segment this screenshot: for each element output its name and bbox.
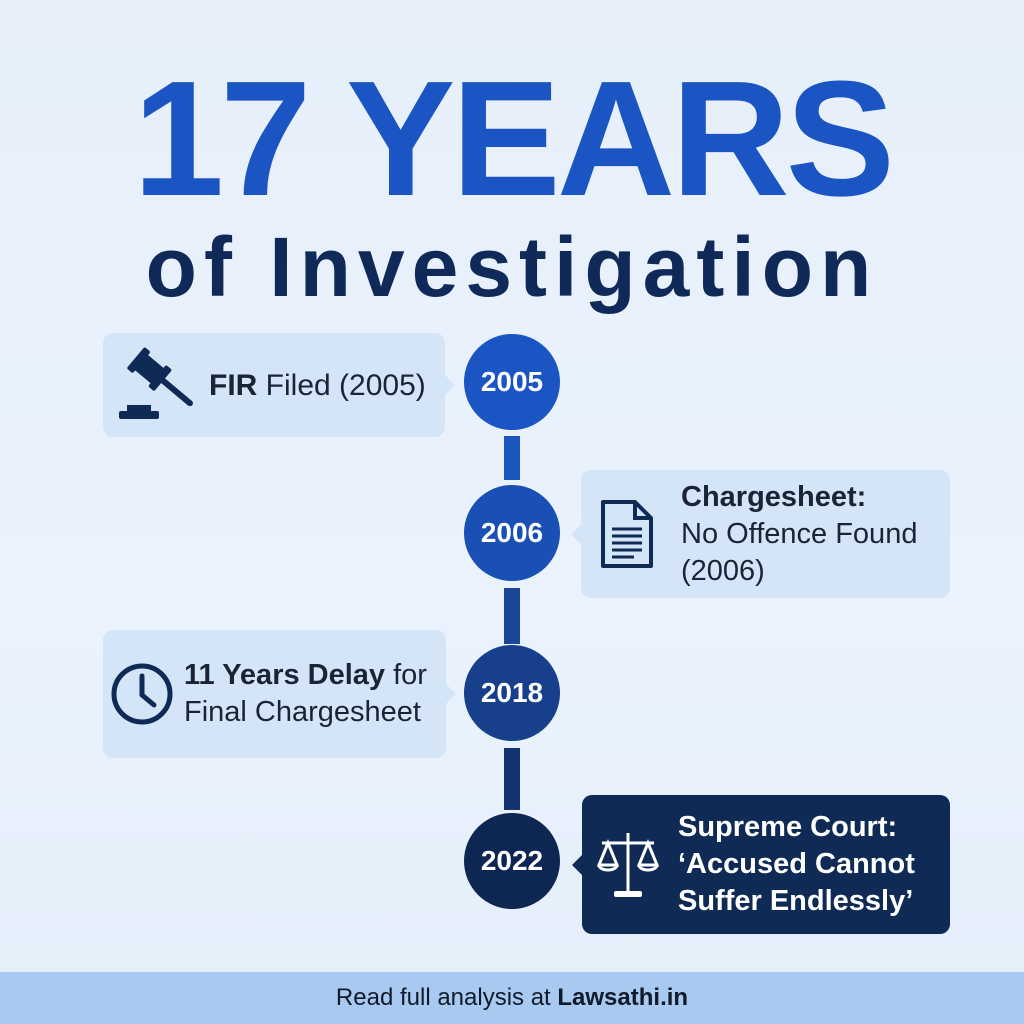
text: chargesheet: Chargesheet:	[681, 480, 866, 512]
circle: 2006: 2006	[481, 517, 543, 548]
text: delay: 11 Years Delay for	[184, 659, 427, 691]
text: chargesheet: No Offence Found	[681, 518, 917, 550]
circle: 2005	[464, 334, 560, 430]
circle: 2022: 2022	[481, 845, 543, 876]
panel: delay	[103, 630, 446, 758]
circle: 2018: 2018	[481, 677, 543, 708]
text: FIR filed: FIR Filed (2005)	[209, 368, 426, 402]
text: supreme court: ‘Accused Cannot	[678, 848, 915, 880]
subtitle: of Investigation	[146, 220, 878, 314]
text: chargesheet	[681, 480, 917, 586]
icon: document	[601, 500, 653, 568]
icon: scales	[596, 833, 660, 897]
circle: 2005: 2005	[481, 366, 543, 397]
panel: supreme court	[582, 795, 950, 934]
text: supreme court: Supreme Court:	[678, 811, 897, 843]
text: supreme court: Suffer Endlessly’	[678, 885, 913, 917]
text: delay: Final Chargesheet	[184, 696, 421, 728]
title: 17 YEARS	[133, 47, 891, 230]
icon: clock	[112, 664, 172, 724]
panel: FIR filed	[103, 333, 445, 437]
text: delay	[184, 659, 427, 728]
icon: gavel	[119, 348, 193, 419]
circle: 2006	[464, 485, 560, 581]
footer: Read full analysis at Lawsathi.in	[336, 984, 688, 1011]
panel: chargesheet	[581, 470, 950, 598]
footer	[0, 972, 1024, 1024]
circle: 2018	[464, 645, 560, 741]
text: chargesheet: (2006)	[681, 554, 765, 586]
text: supreme court	[678, 811, 915, 917]
circle: 2022	[464, 813, 560, 909]
